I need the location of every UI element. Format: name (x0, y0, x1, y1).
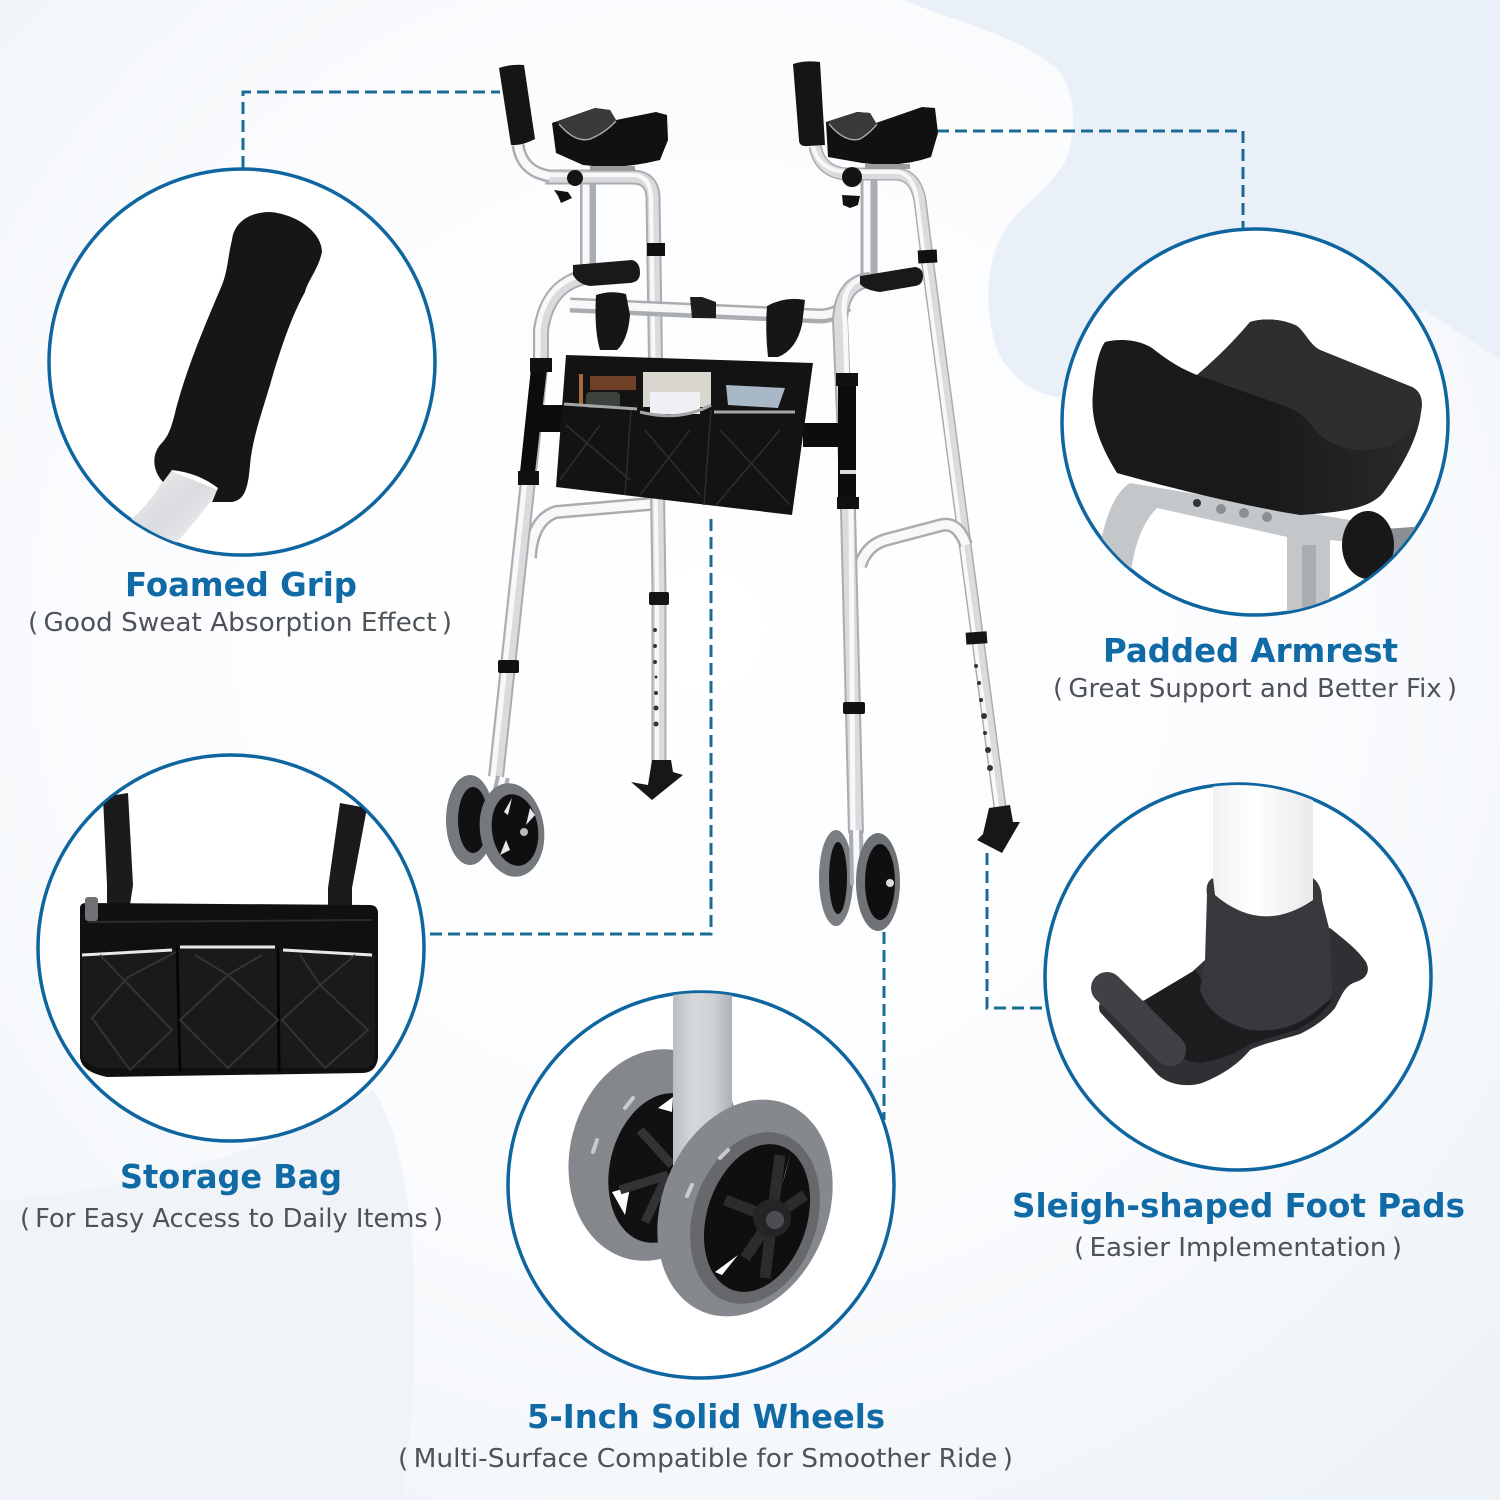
left upper grip (499, 65, 535, 145)
panel: foamed grip (49, 169, 435, 560)
heading: padded armrest: Padded Armrest (1103, 631, 1398, 670)
foot pads (631, 760, 1020, 853)
white tube (131, 471, 218, 542)
straps (103, 793, 367, 905)
connector lines (243, 92, 1243, 1120)
frame cross brackets (535, 405, 839, 447)
right arm cuff (826, 107, 938, 208)
bag contents (579, 372, 785, 414)
icon: bag body (80, 903, 378, 1077)
pocket trim (564, 404, 795, 416)
right upper grip (793, 61, 825, 146)
icon: cushion (1092, 319, 1422, 515)
cross bar (570, 297, 846, 318)
heading: storage bag: Storage Bag (120, 1157, 342, 1196)
lower braces (530, 504, 966, 566)
panel: foot pads (1045, 775, 1431, 1170)
quilted panel (82, 947, 375, 1068)
text: padded armrest note: ( Great Support and Better Fix ) (1053, 674, 1457, 704)
heading: foot pads: Sleigh-shaped Foot Pads (1012, 1186, 1465, 1225)
front right leg (836, 277, 870, 833)
heading: foamed grip: Foamed Grip (125, 565, 357, 604)
product: walker (446, 61, 1020, 931)
left arm cuff (552, 108, 668, 203)
adjustment holes (1193, 499, 1272, 522)
storage bag on walker (535, 355, 839, 515)
pocket seams and quilting (177, 947, 279, 1072)
front left leg (493, 273, 590, 777)
quilt (560, 410, 790, 505)
text: foot pads note: ( Easier Implementation ) (1074, 1233, 1402, 1263)
text: storage bag note: ( For Easy Access to Daily Items ) (20, 1204, 443, 1234)
heading: solid wheels: 5-Inch Solid Wheels (527, 1397, 885, 1436)
icon: foot pad plate (1099, 928, 1368, 1085)
text: solid wheels note: ( Multi-Surface Compatible for Smoother Ride ) (398, 1444, 1013, 1474)
panel: storage bag (38, 755, 424, 1141)
panel: padded armrest (1062, 229, 1448, 625)
panel: solid wheels (508, 985, 894, 1378)
cushion inner (1197, 319, 1422, 450)
frame (1102, 483, 1350, 612)
roller (1107, 988, 1170, 1050)
knob (1388, 526, 1416, 560)
icon: foam grip (154, 212, 322, 502)
plate recess (1145, 970, 1333, 1063)
reflective trim (82, 947, 372, 955)
hanging bag straps (596, 292, 805, 357)
text: foamed grip note: ( Good Sweat Absorption Effect ) (28, 608, 452, 638)
rear left leg (518, 145, 669, 762)
tyre highlights (593, 1098, 728, 1196)
aluminium tube (673, 993, 732, 1166)
front wheel (657, 1100, 833, 1316)
rear right leg (813, 146, 1000, 807)
left wheels (446, 775, 550, 881)
right wheels (819, 830, 900, 931)
handgrip foam pads (573, 260, 923, 292)
aluminium tube (1213, 785, 1313, 916)
back wheel (568, 1049, 734, 1261)
collar (1200, 878, 1332, 1031)
